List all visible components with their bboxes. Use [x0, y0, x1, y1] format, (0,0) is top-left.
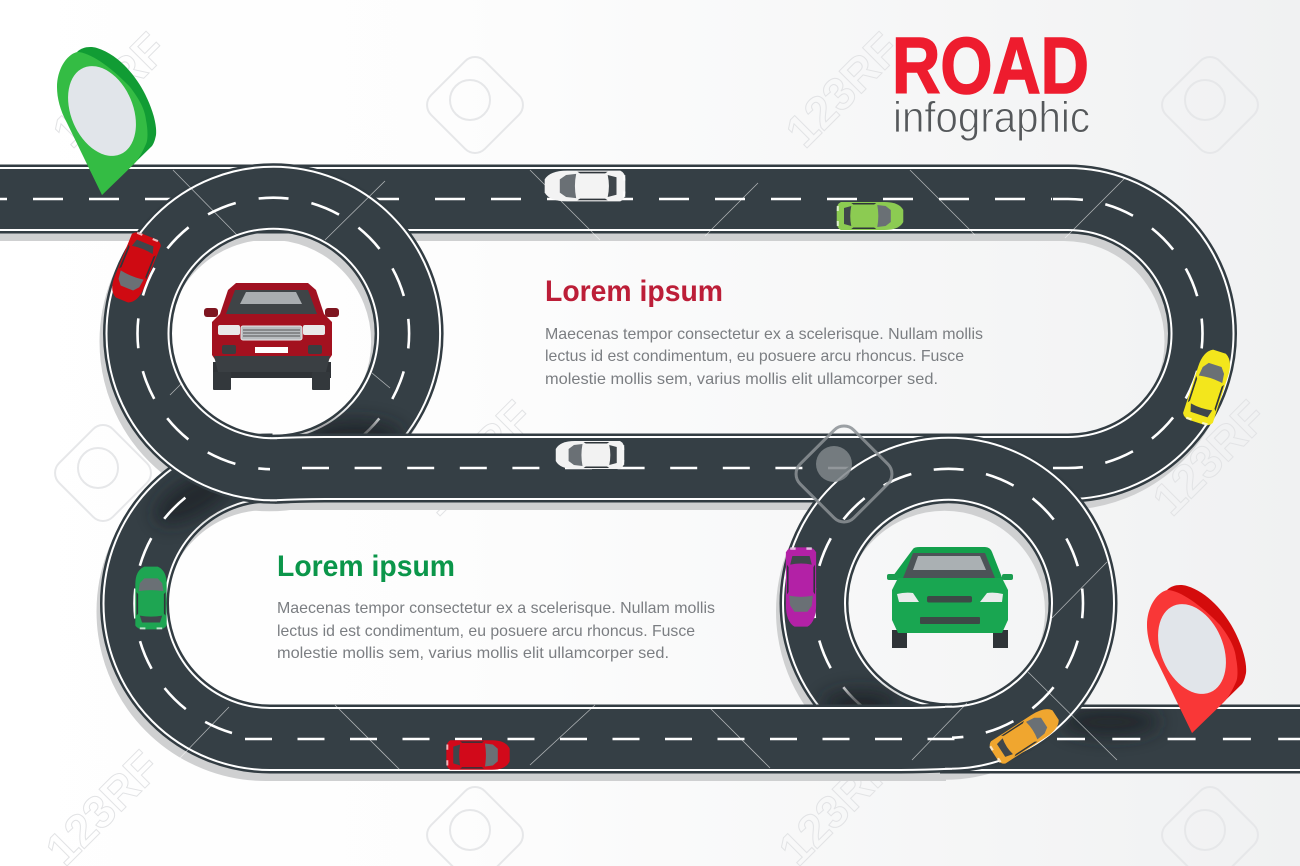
heading: upper panel: Lorem ipsum — [545, 275, 723, 308]
car: light green, upper road — [837, 202, 903, 230]
car: white, middle road — [556, 441, 624, 469]
subtitle: infographic: infographic — [893, 93, 1090, 142]
car: red, first ring — [108, 230, 162, 306]
body: upper panel: lectus id est condimentum, eu posuere arcu rhoncus. Fusce — [545, 348, 964, 365]
body: upper panel: molestie mollis sem, varius mollis elit ullamcorper sed. — [545, 371, 938, 388]
road: S-bend lower quarter and lower straight — [134, 604, 965, 739]
large red SUV front view — [204, 283, 339, 390]
body: lower panel: molestie mollis sem, varius mollis elit ullamcorper sed. — [277, 645, 669, 662]
body: upper panel: Maecenas tempor consectetur ex a scelerisque. Nullam mollis — [545, 326, 983, 343]
road shadow — [0, 206, 1198, 747]
pin: green start marker — [55, 47, 156, 195]
watermark on road — [790, 420, 898, 528]
heading: lower panel: Lorem ipsum — [277, 550, 455, 583]
watermarks on background: 123RF — [775, 23, 910, 157]
watermarks on background: 123RF — [408, 391, 543, 525]
body: lower panel: lectus id est condimentum, eu posuere arcu rhoncus. Fusce — [277, 623, 695, 640]
text block: lower panel — [277, 550, 715, 662]
pin: red finish marker — [1145, 585, 1246, 733]
road: upper straight, west part — [0, 164, 430, 234]
car: red, lower road — [446, 740, 510, 770]
car: magenta, second ring — [786, 547, 816, 627]
pin face — [1147, 590, 1238, 733]
watermarks on background: 123RF — [42, 23, 177, 157]
road: second roundabout ring — [814, 469, 1083, 738]
car: green, lower bend — [135, 567, 167, 629]
large green car front view — [887, 547, 1013, 648]
road: lower straight, east end — [940, 707, 1300, 739]
road: upper straight, east curve and middle straight — [270, 199, 1202, 469]
pin face — [57, 52, 148, 195]
pin window — [55, 56, 149, 166]
road: S-bend upper quarter — [134, 459, 272, 604]
road: first roundabout ring — [137, 198, 409, 469]
body: lower panel — [277, 600, 715, 662]
car: orange, second ring — [987, 704, 1063, 766]
body: upper panel — [545, 326, 983, 388]
body: lower panel: Maecenas tempor consectetur ex a scelerisque. Nullam mollis — [277, 600, 715, 617]
text block: upper panel — [545, 275, 983, 388]
title: ROAD: ROAD — [892, 21, 1089, 110]
car: white, upper road — [545, 171, 625, 201]
watermarks on background: 123RF — [1142, 391, 1277, 525]
car: yellow, east curve — [1182, 347, 1234, 427]
thin diagonal fold lines — [170, 170, 1125, 770]
pin window — [1145, 594, 1239, 704]
